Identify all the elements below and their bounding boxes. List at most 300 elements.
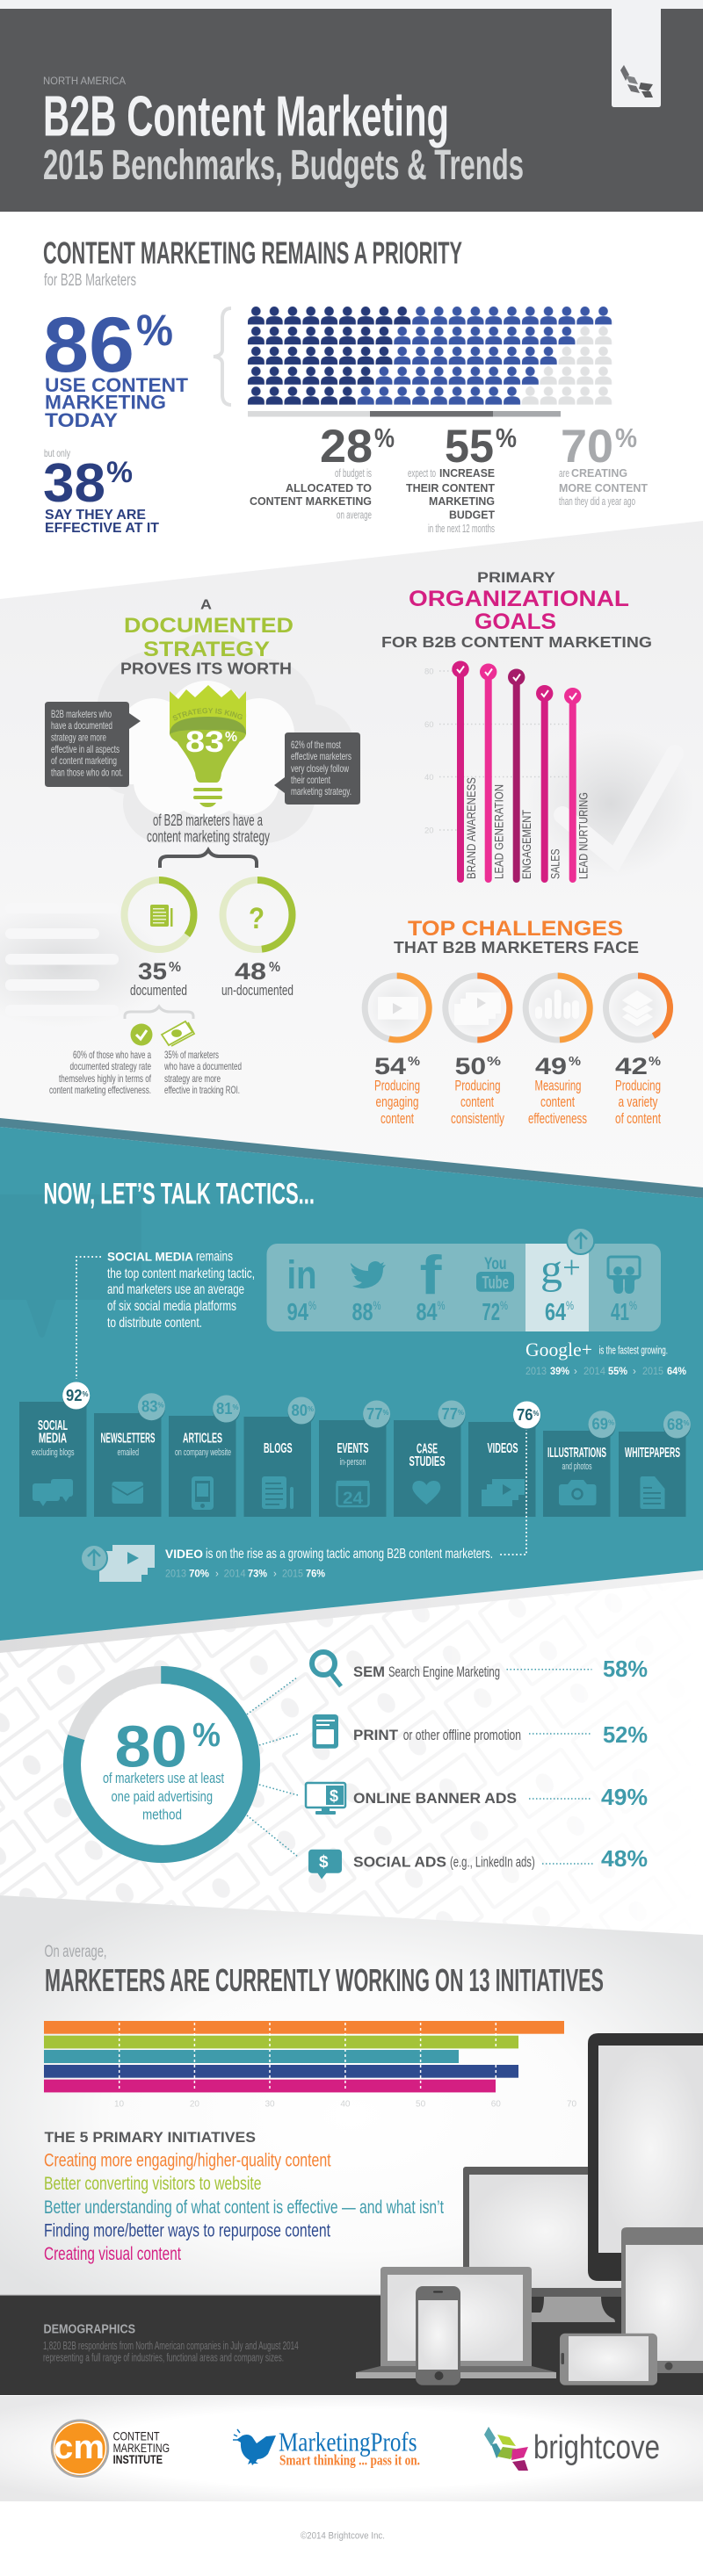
callout: left: than those who do not.	[51, 766, 123, 778]
stat: 70 percent: are	[559, 466, 569, 480]
heading: CONTENT MARKETING REMAINS A PRIORITY	[43, 236, 462, 271]
background: initiatives section	[0, 1895, 703, 2295]
heading	[120, 597, 294, 678]
tile: newsletters: NEWSLETTERS	[100, 1432, 156, 1447]
text: 80 percent: 80	[114, 1714, 187, 1780]
bar: lead nurturing	[564, 688, 591, 883]
dotted connector: video	[498, 1429, 526, 1555]
challenge: variety of content	[606, 976, 670, 1127]
icon: lightbulb with crown: STRATEGY IS KING	[172, 708, 243, 720]
tile: case studies: STUDIES	[409, 1454, 446, 1469]
challenge: measuring effectiveness: %	[569, 1054, 581, 1069]
stat: 86 percent: MARKETING	[45, 392, 166, 413]
stacked share bar	[248, 411, 561, 416]
challenge: measuring effectiveness	[525, 976, 590, 1127]
decorative list icon	[5, 903, 119, 1042]
text: 60 percent note: 60% of those who have a	[73, 1049, 151, 1061]
stat: 28 percent: of budget is	[335, 466, 372, 480]
text: video growth: 2014	[224, 1569, 246, 1580]
icon: question mark: ?	[249, 902, 265, 935]
row: social ads: 48%	[601, 1845, 648, 1872]
panel: paid advertising	[72, 1652, 648, 1880]
chart: initiatives bars: 50	[416, 2100, 426, 2110]
header banner	[0, 0, 703, 212]
stat: 55 percent	[406, 421, 517, 535]
challenge: engaging content	[365, 976, 429, 1127]
background: faint speech bubble	[0, 1194, 141, 1338]
text: social media: of six social media platforms	[107, 1299, 236, 1314]
tile: whitepapers: %	[684, 1419, 689, 1427]
stat: 35 documented: 35	[138, 958, 167, 985]
challenge: consistent content: %	[487, 1054, 501, 1069]
text: video growth: 73%	[248, 1569, 267, 1580]
stat: 35 documented: documented	[130, 982, 187, 999]
platform: google plus	[540, 1246, 579, 1325]
tile: social media	[19, 1382, 90, 1517]
chart: 80 percent donut	[72, 1675, 251, 1854]
light brace	[125, 1007, 193, 1019]
tile: events	[319, 1400, 390, 1517]
challenge: measuring effectiveness: 49	[535, 1053, 567, 1079]
challenge: engaging content: content	[380, 1110, 414, 1127]
tile: blogs: BLOGS	[264, 1441, 293, 1456]
heading: ORGANIZATIONAL	[409, 587, 629, 611]
demographics heading: DEMOGRAPHICS	[44, 2323, 135, 2337]
challenge: engaging content: 54	[374, 1053, 406, 1079]
laptop	[356, 2267, 556, 2378]
heading: PROVES ITS WORTH	[120, 659, 292, 678]
platform: youtube	[476, 1255, 514, 1325]
heading	[394, 917, 639, 956]
panel: social platforms	[267, 1228, 661, 1331]
chart: initiatives bars: 20	[190, 2100, 199, 2110]
row: online banner ads: 49%	[601, 1784, 648, 1810]
row: social ads: $	[319, 1853, 329, 1872]
tile: whitepapers	[619, 1411, 691, 1517]
row: print: 52%	[603, 1721, 648, 1748]
icon: document	[150, 905, 172, 927]
callout: left: B2B marketers who	[51, 708, 112, 720]
logo: content marketing institute: MARKETING	[113, 2441, 170, 2455]
tile: newsletters: %	[158, 1402, 163, 1410]
text: video growth: 70%	[189, 1569, 209, 1580]
stat: 28 percent: on average	[337, 508, 372, 522]
illustration: devices	[356, 2033, 703, 2385]
icon: brightcove gray logo	[620, 65, 653, 97]
challenge: measuring effectiveness: effectiveness	[528, 1110, 587, 1127]
heading: FOR B2B CONTENT MARKETING	[381, 633, 652, 651]
north america label: NORTH AMERICA	[43, 75, 126, 87]
tile: events: in-person	[339, 1457, 366, 1468]
heading: TOP CHALLENGES	[408, 917, 623, 941]
stat: 28 percent: CONTENT MARKETING	[250, 494, 372, 508]
icon: lightbulb with crown: %	[225, 730, 237, 745]
challenge: variety of content: of content	[615, 1110, 661, 1127]
bar: sales: SALES	[548, 848, 562, 879]
tile: illustrations: and photos	[562, 1461, 592, 1472]
tile: social media: 92	[66, 1387, 83, 1404]
logo: marketingprofs: Smart thinking ... pass it on.	[279, 2452, 420, 2469]
text: 80 percent: method	[142, 1807, 182, 1823]
footer band: demographics	[0, 2294, 703, 2395]
heading: NOW, LET’S TALK TACTICS...	[44, 1178, 315, 1211]
text: social media: to distribute content.	[107, 1316, 202, 1331]
row: social ads: SOCIAL ADS	[353, 1855, 446, 1871]
platform: facebook: f	[420, 1245, 442, 1306]
callout: left: strategy are more	[51, 731, 106, 743]
tile: case studies: %	[458, 1409, 464, 1417]
bubble: videos 76 percent: %	[533, 1410, 540, 1418]
chart: goals bars: 20	[424, 826, 434, 836]
text: social media	[107, 1250, 255, 1331]
stat: 86 percent	[43, 300, 189, 431]
stat: 86 percent: USE CONTENT	[45, 374, 189, 396]
stat: 55 percent: %	[496, 422, 517, 453]
platform: twitter: %	[373, 1298, 381, 1312]
chart: initiatives bars	[44, 2021, 576, 2110]
icon: video growth	[81, 1545, 155, 1582]
callout: right: marketing strategy.	[291, 785, 352, 797]
text: 35 percent note: strategy are more	[164, 1072, 221, 1085]
chart: goals bars	[424, 660, 591, 883]
text: 35 percent note: 35% of marketers	[164, 1049, 219, 1061]
logo: marketingprofs	[233, 2427, 420, 2469]
tile: blogs	[244, 1396, 315, 1517]
platform: google plus: %	[566, 1298, 574, 1312]
heading: GOALS	[475, 610, 556, 634]
text: 60 percent note: themselves highly in terms of	[59, 1072, 151, 1085]
list: five initiatives: Better converting visitors to website	[44, 2174, 262, 2194]
brace	[160, 850, 257, 868]
bar: brand awareness	[452, 660, 478, 883]
panel: top challenges	[365, 917, 670, 1127]
stat: 48 un-documented: un-documented	[221, 982, 294, 999]
chart: goals bars: 60	[424, 720, 434, 730]
callout: right: very closely follow	[291, 762, 349, 775]
challenge: consistent content: content	[460, 1093, 494, 1110]
callout: left: have a documented	[51, 719, 112, 732]
tile: whitepapers: 68	[667, 1416, 684, 1433]
background: logos strip	[0, 2396, 703, 2501]
platform: slideshare	[606, 1257, 641, 1325]
icon: money	[162, 1021, 194, 1046]
logo: content marketing institute: CONTENT	[113, 2429, 160, 2443]
background: teal dark band	[0, 1118, 703, 1198]
text: google plus growth: 2015	[642, 1367, 663, 1377]
big monitor	[588, 2033, 703, 2281]
tile: social media: SOCIAL	[38, 1418, 68, 1433]
donut center	[82, 1685, 242, 1844]
stat: 70 percent: CREATING	[571, 466, 627, 480]
stat: 28 percent: ALLOCATED TO	[286, 481, 372, 494]
stat: 70 percent	[559, 421, 648, 508]
list: five initiatives: Creating visual content	[44, 2244, 181, 2264]
text: 80 percent: one paid advertising	[111, 1788, 213, 1805]
row: print	[313, 1714, 648, 1749]
middle monitor	[463, 2167, 621, 2322]
tile: videos: VIDEOS	[487, 1441, 518, 1456]
platform: twitter	[351, 1261, 386, 1325]
tile: social media: MEDIA	[39, 1432, 67, 1447]
platform: linkedin: 94	[286, 1298, 308, 1325]
stat: 70 percent: MORE CONTENT	[559, 481, 648, 494]
row: SEM: SEM	[353, 1664, 385, 1680]
text: 83 percent caption: of B2B marketers have a	[153, 812, 264, 829]
platform: facebook: %	[438, 1298, 445, 1312]
stat: 55 percent: MARKETING	[429, 494, 495, 508]
tile: illustrations: %	[608, 1419, 614, 1427]
text: google plus growth: 55%	[608, 1367, 627, 1377]
background: money pattern	[0, 1605, 482, 1922]
dotted connector: social	[76, 1257, 101, 1379]
copyright: ©2014 Brightcove Inc.	[301, 2531, 385, 2542]
icon: check	[130, 1024, 153, 1045]
stat: 28 percent: %	[374, 422, 395, 453]
platform: slideshare: %	[629, 1298, 637, 1312]
heading: DOCUMENTED	[124, 614, 294, 638]
decorative check	[562, 754, 675, 859]
bar: lead generation: LEAD GENERATION	[492, 784, 506, 879]
stat: 35 documented: %	[169, 960, 181, 975]
stat: 48 un-documented	[221, 958, 294, 999]
text: 60 percent note: content marketing effectiveness.	[49, 1084, 151, 1096]
challenge: consistent content: 50	[455, 1053, 486, 1079]
text: 60 percent note: documented strategy rate	[70, 1060, 151, 1072]
challenge: measuring effectiveness: Measuring	[534, 1077, 582, 1094]
text: 80 percent: of marketers use at least	[103, 1770, 224, 1786]
text: 80 percent	[103, 1714, 224, 1823]
inner white cloud	[107, 681, 315, 817]
bar: lead generation	[480, 664, 506, 883]
heading: THAT B2B MARKETERS FACE	[394, 939, 639, 956]
bar: lead nurturing: LEAD NURTURING	[576, 792, 591, 879]
platform: linkedin: in	[286, 1252, 316, 1297]
heading	[381, 569, 652, 651]
bar: engagement: ENGAGEMENT	[520, 810, 533, 879]
demographics text: representing a full range of industries, functional areas and company sizes.	[43, 2351, 284, 2364]
platform: youtube: You	[484, 1255, 506, 1274]
challenge: variety of content: %	[649, 1054, 661, 1069]
large tablet	[621, 2227, 703, 2373]
tile: illustrations: ILLUSTRATIONS	[547, 1446, 606, 1461]
header tab	[612, 0, 661, 107]
chart: 35 percent donut	[125, 880, 193, 949]
row: online banner ads	[306, 1783, 648, 1815]
list: five initiatives: Finding more/better ways to repurpose content	[44, 2221, 330, 2241]
stat: 70 percent: 70	[561, 421, 613, 473]
brace	[214, 308, 231, 405]
tile: newsletters: 83	[141, 1398, 158, 1416]
heading: A	[200, 597, 212, 613]
tile: case studies: 77	[441, 1405, 458, 1423]
text: 35 percent note: who have a documented	[163, 1060, 242, 1072]
text: video growth: is on the rise as a growing tactic among B2B content marketers.	[206, 1547, 493, 1562]
callout: right: their content	[291, 774, 330, 786]
tile: events: 24	[343, 1490, 363, 1508]
tile: social media: excluding blogs	[32, 1447, 75, 1458]
tile: articles: on company website	[175, 1447, 231, 1458]
dotted connectors	[247, 1678, 298, 1857]
text: google plus growth: 39%	[550, 1367, 569, 1377]
background: teal section	[0, 1127, 703, 1641]
list heading: THE 5 PRIMARY INITIATIVES	[44, 2129, 256, 2146]
stat: 55 percent: THEIR CONTENT	[406, 481, 495, 494]
background cloud	[92, 632, 354, 843]
text: video growth: ›	[273, 1569, 277, 1580]
stat: 38 percent: 38	[43, 453, 105, 514]
row: online banner ads: $	[330, 1787, 338, 1805]
callout: left: of content marketing	[51, 754, 117, 767]
heading: STRATEGY	[143, 638, 270, 661]
bar: brand awareness: BRAND AWARENESS	[465, 777, 478, 879]
text: 83 percent caption: content marketing strategy	[147, 827, 270, 845]
platform: linkedin: %	[308, 1298, 316, 1312]
platform: google plus: 64	[545, 1298, 566, 1325]
row: online banner ads: ONLINE BANNER ADS	[353, 1791, 517, 1807]
but only: but only	[44, 447, 70, 459]
text: video growth: VIDEO	[165, 1547, 203, 1561]
text: google plus growth: 2014	[583, 1367, 606, 1377]
tile: newsletters	[94, 1393, 165, 1517]
background: gray strategy section	[0, 521, 703, 1194]
tile: case studies: CASE	[417, 1441, 438, 1456]
stat: 38 percent: SAY THEY ARE	[45, 508, 146, 523]
tile: articles: 81	[216, 1400, 232, 1418]
text: google plus growth: ›	[574, 1367, 577, 1377]
icon: up arrow	[567, 1228, 594, 1254]
demographics text: 1,820 B2B respondents from North American companies in July and August 2014	[43, 2339, 299, 2352]
tile: blogs: %	[308, 1405, 314, 1413]
stat: 38 percent: %	[106, 456, 133, 489]
phone	[416, 2286, 460, 2385]
challenge: variety of content: 42	[615, 1053, 648, 1079]
text: social media: SOCIAL MEDIA	[107, 1250, 193, 1264]
platform: facebook	[417, 1245, 445, 1325]
panel: content marketing priority	[43, 236, 648, 536]
challenge: engaging content: Producing	[374, 1077, 420, 1094]
list: five initiatives: Better understanding of what content is effective — and what isn’t	[44, 2197, 444, 2218]
row: print: PRINT	[353, 1728, 398, 1743]
callout: right: 62% of the most	[291, 739, 341, 751]
list: five initiatives: Creating more engaging/higher-quality content	[44, 2151, 331, 2171]
stat: 55 percent: INCREASE	[439, 466, 495, 480]
platform: facebook: 84	[417, 1298, 438, 1325]
text: video growth: 2013	[165, 1569, 186, 1580]
panel: initiatives	[44, 1943, 604, 2264]
decorative list icon shadow	[0, 905, 167, 1028]
challenge: consistent content	[446, 976, 510, 1127]
text: video growth: ›	[215, 1569, 219, 1580]
stat: 35 documented	[130, 958, 187, 999]
bubble: videos 76 percent	[513, 1402, 540, 1430]
platform: linkedin	[286, 1252, 316, 1325]
chart: initiatives bars: 60	[491, 2100, 501, 2110]
subheading: for B2B Marketers	[44, 271, 136, 290]
text: video growth: 2015	[282, 1569, 303, 1580]
icon: lightbulb with crown	[170, 685, 246, 807]
callout: right: effective marketers	[291, 750, 352, 762]
demographics text	[43, 2339, 299, 2364]
platform: youtube: %	[500, 1298, 508, 1312]
challenge: engaging content: engaging	[376, 1093, 418, 1110]
text: video growth: 76%	[306, 1569, 325, 1580]
text: google plus growth: 64%	[667, 1367, 686, 1377]
row: social ads	[308, 1845, 648, 1880]
stat: 55 percent: expect to	[408, 466, 436, 480]
decorative check shadow	[527, 729, 694, 878]
tile: illustrations: 69	[592, 1416, 608, 1433]
tile: articles: %	[232, 1403, 239, 1411]
background: top strip	[0, 0, 703, 9]
tile: illustrations	[543, 1411, 615, 1517]
stat: 70 percent: than they did a year ago	[559, 494, 635, 508]
text: 35 percent note	[163, 1049, 242, 1096]
intro text: On average,	[44, 1943, 107, 1961]
chart: goals bars: 80	[424, 667, 434, 676]
challenge: variety of content: a variety	[619, 1093, 658, 1110]
panel: organizational goals	[381, 569, 694, 883]
tile: blogs: 80	[292, 1402, 308, 1419]
challenge: measuring effectiveness: content	[540, 1093, 575, 1110]
challenge: engaging content: %	[408, 1054, 420, 1069]
stat: 55 percent: in the next 12 months	[428, 522, 495, 535]
bar: sales	[536, 685, 562, 883]
chart: initiatives bars: 30	[265, 2100, 275, 2110]
stat: 55 percent: 55	[445, 421, 494, 473]
callout: left	[45, 702, 141, 787]
tile: case studies	[394, 1400, 466, 1517]
row: SEM: Search Engine Marketing	[388, 1664, 500, 1680]
logo: brightcove: brightcove	[533, 2429, 660, 2466]
row: SEM	[312, 1652, 648, 1686]
logo: content marketing institute: cm	[54, 2429, 105, 2466]
tile: events: EVENTS	[337, 1441, 369, 1456]
logo: marketingprofs: MarketingProfs	[279, 2427, 417, 2457]
tile: articles: ARTICLES	[183, 1432, 222, 1447]
text: social media: remains	[196, 1250, 233, 1265]
text: 60 percent note	[49, 1049, 151, 1096]
stat: 86 percent: TODAY	[45, 409, 118, 431]
chart: initiatives bars: 70	[567, 2100, 576, 2110]
stat: 28 percent: 28	[320, 421, 373, 473]
tile: articles	[169, 1395, 240, 1517]
platform: youtube: Tube	[482, 1274, 509, 1293]
row: SEM: 58%	[603, 1656, 648, 1682]
platform: google plus: g	[540, 1246, 562, 1293]
platform: youtube: 72	[482, 1298, 500, 1325]
small tablet	[560, 2334, 657, 2385]
list: five initiatives	[44, 2151, 444, 2264]
main title: B2B Content Marketing	[43, 84, 449, 148]
tile: social media: %	[83, 1390, 88, 1398]
challenge: consistent content: consistently	[451, 1110, 504, 1127]
stat: 38 percent: EFFECTIVE AT IT	[45, 521, 159, 536]
text: 80 percent: %	[192, 1717, 221, 1754]
text: video growth	[165, 1547, 493, 1580]
text: 83 percent caption	[147, 812, 270, 845]
row: print: or other offline promotion	[403, 1728, 521, 1743]
stat: 70 percent: %	[615, 422, 637, 453]
chart: 48 percent donut	[223, 880, 292, 949]
chart: initiatives bars: 40	[340, 2100, 351, 2110]
row: social ads: (e.g., LinkedIn ads)	[450, 1855, 535, 1871]
stat: 86 percent: 86	[43, 300, 134, 388]
callout: right	[274, 732, 360, 805]
callout: left: effective in all aspects	[51, 743, 120, 755]
bubble: videos 76 percent: 76	[517, 1406, 533, 1424]
tile: videos	[468, 1422, 536, 1517]
text: google plus growth: 2013	[525, 1367, 547, 1377]
